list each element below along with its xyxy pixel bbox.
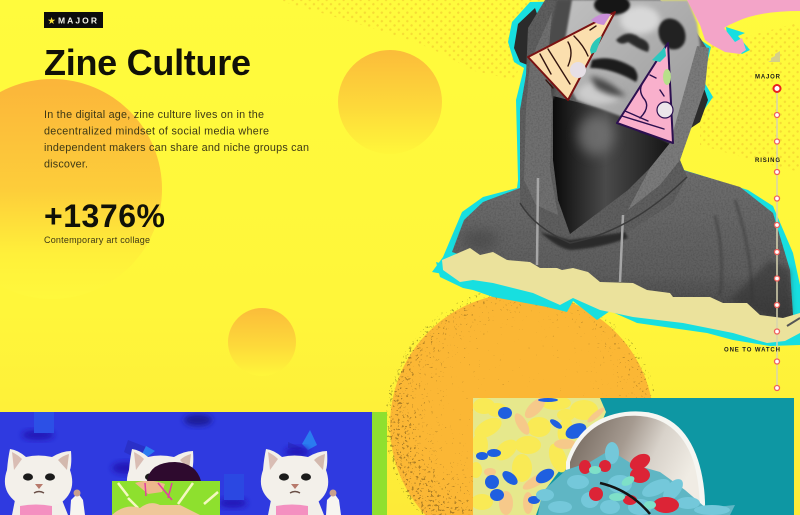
- circle: lower middle: [228, 308, 296, 376]
- torn paper strip: [436, 248, 800, 346]
- circle: upper middle: [338, 50, 442, 154]
- pizza slice: pink: [617, 43, 673, 143]
- crust lines: [622, 75, 664, 135]
- drawstrings: [537, 178, 623, 282]
- hoodie torso: [452, 170, 794, 330]
- description: In the digital age, zine culture lives on in the: [44, 109, 264, 121]
- panel: blue cats: [0, 412, 387, 515]
- torso fold right: [715, 200, 752, 300]
- topping green: [663, 69, 671, 85]
- title: Zine Culture: [44, 42, 251, 83]
- face: [560, 0, 700, 143]
- red petals: [579, 450, 679, 513]
- hood base: [520, 0, 708, 243]
- label: rising: RISING: [755, 158, 780, 164]
- yellow petals: [470, 396, 598, 510]
- circle: large left: [0, 79, 162, 299]
- strip dark tip: [787, 318, 800, 326]
- cat: left: [5, 449, 85, 515]
- topping white: [570, 62, 586, 78]
- halftone background: [277, 0, 800, 172]
- green edge strip: [372, 412, 387, 515]
- label: major: MAJOR: [755, 74, 781, 80]
- topping teal: [652, 47, 666, 62]
- description: decentralized mindset of social media where: [44, 126, 269, 138]
- torso lower shade: [730, 260, 792, 325]
- cheek highlight: [578, 82, 622, 104]
- icon: signal bars: [768, 51, 780, 62]
- lips: [590, 58, 638, 82]
- eye left: [594, 0, 630, 15]
- figure: hooded man: [432, 0, 800, 340]
- badge: major: [44, 12, 103, 28]
- green box: [112, 481, 220, 515]
- neck highlight: [578, 115, 614, 155]
- mint petals: [589, 466, 656, 509]
- description: discover.: [44, 158, 88, 170]
- circle: big orange: [390, 293, 654, 515]
- stat caption: Contemporary art collage: [44, 235, 150, 245]
- strip cream: [442, 248, 800, 343]
- neck shadow: [553, 96, 670, 234]
- chest band shade: [540, 232, 628, 250]
- topping purple: [591, 14, 611, 25]
- torso shade left arm: [462, 230, 498, 250]
- pizza slice: cream: [528, 12, 615, 100]
- head white outline: [566, 411, 705, 515]
- cat: right: [261, 449, 341, 515]
- label: one to watch: ONE TO WATCH: [724, 348, 780, 354]
- blue petals: [476, 398, 589, 504]
- timeline nodes: [774, 85, 780, 390]
- panel: teal flowers: [470, 395, 794, 515]
- hood inner left shade: [546, 0, 575, 100]
- crust lines: [540, 26, 596, 88]
- stat value: +1376%: [44, 198, 165, 234]
- flowers base: [473, 398, 606, 515]
- cat: middle: [127, 449, 207, 515]
- hairband: [600, 483, 650, 514]
- topping white: [657, 102, 673, 118]
- hood edge left: [524, 12, 558, 215]
- headphones: [514, 8, 708, 130]
- badge text: MAJOR: [58, 16, 97, 26]
- badge star: ★: [48, 16, 56, 26]
- teal petals: [536, 442, 730, 515]
- nostrils: [616, 33, 649, 52]
- strip cyan shadow: [436, 262, 800, 346]
- head hair: [570, 416, 700, 501]
- dark hair: [147, 462, 201, 481]
- description: independent makers can share and niche groups can: [44, 142, 309, 154]
- peach petals: [484, 395, 606, 515]
- collar: [520, 177, 687, 243]
- under lip shadow: [590, 76, 626, 96]
- description: [44, 109, 309, 170]
- petal mass: [538, 450, 735, 515]
- pink splash: [687, 0, 800, 54]
- nose highlight: [620, 6, 660, 34]
- eye right: [653, 14, 691, 54]
- cyan silhouette: [432, 0, 800, 340]
- timeline rail: [776, 88, 778, 388]
- cubes: [22, 412, 317, 508]
- black speckle texture: [385, 287, 659, 515]
- hood edge right: [628, 46, 709, 210]
- topping teal: [590, 36, 602, 54]
